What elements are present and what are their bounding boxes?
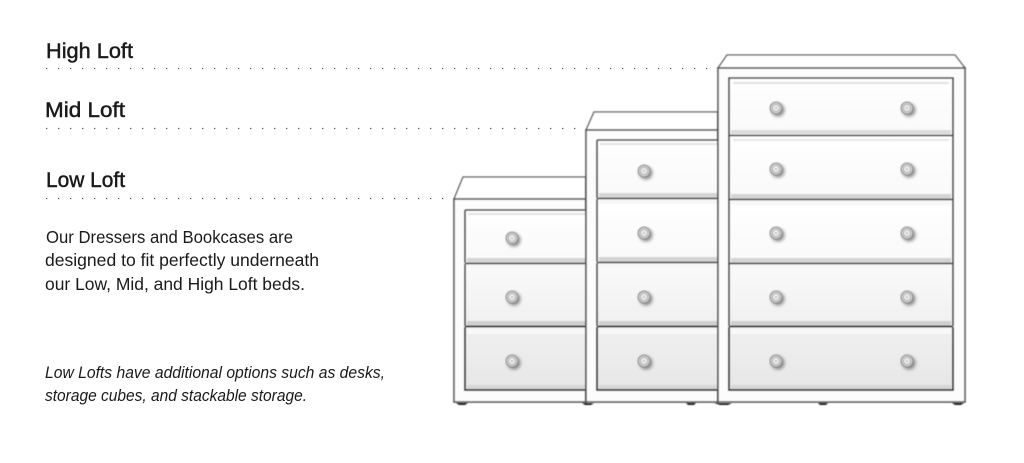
drawer 1 (729, 78, 953, 135)
dresser: mid loft (586, 112, 732, 405)
drawer 5 (729, 326, 953, 390)
feet (456, 403, 594, 405)
drawer 3 (465, 326, 586, 390)
italic note: storage cubes, and stackable storage. (45, 387, 307, 405)
description text: Our Dressers and Bookcases are (46, 227, 293, 247)
drawer 2 (729, 136, 953, 199)
heading: High Loft: High Loft (46, 40, 133, 63)
drawer 2 (597, 198, 718, 262)
drawer 3 (729, 200, 953, 263)
dresser: low loft (454, 177, 594, 405)
dotted line: Mid Loft height (46, 128, 586, 130)
drawer 1 (597, 140, 718, 198)
dresser: high loft (718, 55, 965, 405)
feet (686, 403, 732, 405)
drawer 2 (465, 264, 586, 326)
heading: Low Loft: Low Loft (46, 169, 125, 192)
feet (818, 403, 964, 405)
dotted line: Low Loft height (46, 198, 452, 200)
description text (45, 227, 319, 294)
drawer 1 (465, 210, 586, 263)
knobs (770, 102, 916, 370)
dotted line: High Loft height (46, 68, 718, 70)
drawer 4 (597, 326, 718, 390)
italic note: Low Lofts have additional options such as desks, (45, 364, 385, 382)
knobs (506, 232, 520, 370)
knobs (638, 165, 652, 370)
drawer 3 (597, 262, 718, 326)
heading: Mid Loft: Mid Loft (45, 99, 125, 122)
description text: our Low, Mid, and High Loft beds. (45, 274, 305, 294)
italic note (45, 364, 385, 405)
description text: designed to fit perfectly underneath (45, 250, 319, 270)
drawer 4 (729, 264, 953, 326)
